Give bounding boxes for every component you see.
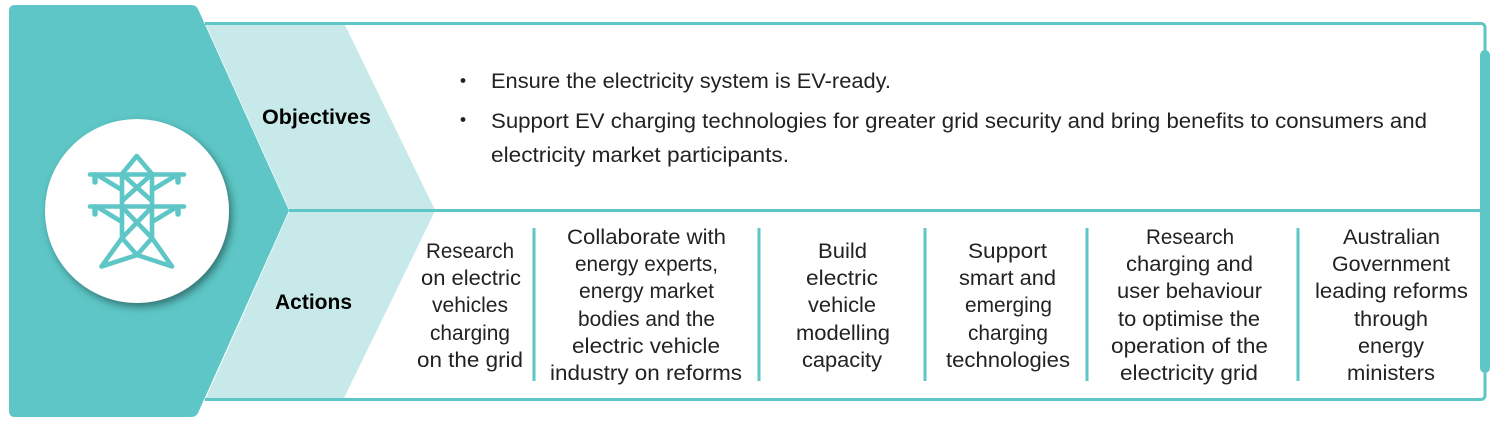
bullet 1 [461,78,465,83]
action 1: charging [430,321,510,345]
objective 2: Support EV charging technologies for greater grid security and bring benefits to consumers and [491,109,1427,133]
heading: objectives: Objectives [262,106,371,129]
actions chevron [206,212,434,398]
objectives chevron [206,25,434,209]
action 3: capacity [802,348,882,372]
icon: transmission tower [90,156,184,266]
action 4 [946,239,1070,372]
icon: circle badge [45,119,229,303]
action 5: charging and [1126,252,1253,276]
bullet 2 [461,117,465,122]
action 4: Support [968,239,1047,263]
action 5: to optimise the [1118,307,1260,331]
action 5: Research [1146,225,1234,249]
action 1: on the grid [417,348,523,372]
action 5: user behaviour [1117,279,1262,303]
action 2: electric vehicle [572,334,720,358]
action 5: electricity grid [1120,361,1258,385]
action 6 [1315,225,1468,385]
action 1: Research [426,239,514,263]
action 2: energy experts, [575,252,718,276]
action 4: smart and [959,266,1056,290]
action 6: through [1354,307,1428,331]
action 2: industry on reforms [550,361,742,385]
action 6: Government [1332,252,1450,276]
column dividers [532,228,1300,381]
action 3 [796,239,890,372]
action 4: charging [968,321,1048,345]
action 3: vehicle [808,293,876,317]
action 6: leading reforms [1315,279,1468,303]
right accent bar [1480,50,1490,373]
action 2: Collaborate with [567,225,726,249]
action 5: operation of the [1111,334,1268,358]
action 4: emerging [965,293,1052,317]
heading: actions: Actions [275,291,352,314]
objective 2 [491,109,1427,167]
panel frame [205,24,1485,400]
action 6: Australian [1343,225,1440,249]
action 1: on electric [421,266,521,290]
action 6: energy [1358,334,1424,358]
action 2: energy market [579,279,714,303]
objective 1: Ensure the electricity system is EV-ready. [491,69,891,93]
objective 2: electricity market participants. [491,143,789,167]
action 2 [550,225,742,385]
action 2: bodies and the [578,307,715,331]
action 6: ministers [1347,361,1435,385]
action 3: electric [806,266,878,290]
action 4: technologies [946,348,1070,372]
action 5 [1111,225,1268,385]
objectives list [461,69,1427,167]
action 1 [417,239,523,372]
main hexagon [9,5,289,417]
action 1: vehicles [432,293,508,317]
action 3: Build [818,239,867,263]
action 3: modelling [796,321,890,345]
